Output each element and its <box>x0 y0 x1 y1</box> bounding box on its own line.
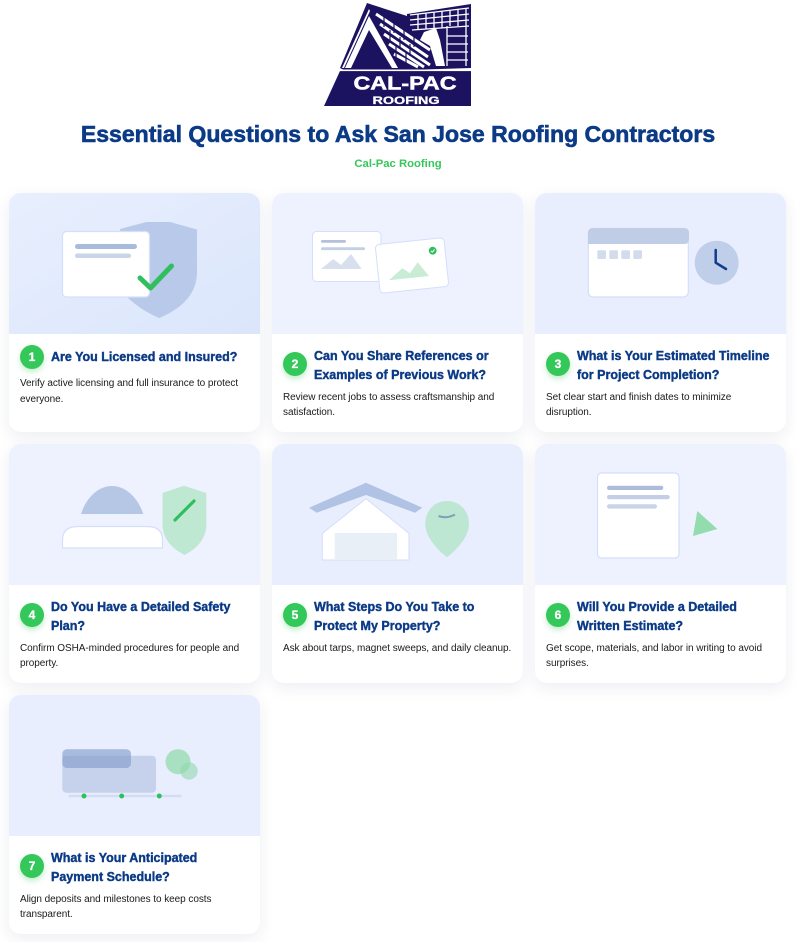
description 7: Align deposits and milestones to keep costs <box>20 894 211 904</box>
logo: Cal-Pac Roofing <box>324 3 471 107</box>
question heading 4: Plan? <box>51 618 85 632</box>
number badge 7: 7 <box>29 859 35 873</box>
panel: question 3 <box>535 193 786 432</box>
question heading 7: Payment Schedule? <box>51 870 170 884</box>
number badge 2 <box>283 352 307 376</box>
description 1: Verify active licensing and full insurance to protect <box>20 378 238 388</box>
number badge 5: 5 <box>292 608 298 622</box>
question heading 3: What is Your Estimated Timeline <box>577 348 769 362</box>
illustration: document and shield with check <box>9 193 260 334</box>
panel: question 6 <box>535 444 786 683</box>
illustration: hard hat and safety shield <box>9 444 260 585</box>
description 4 <box>20 642 239 668</box>
question heading 6 <box>576 600 737 632</box>
logo: Cal-Pac Roofing: CAL-PAC <box>354 74 456 94</box>
logo: Cal-Pac Roofing: ROOFING <box>372 95 440 107</box>
question heading 2: Can You Share References or <box>314 348 489 362</box>
number badge 5 <box>283 603 307 627</box>
question heading 5: Protect My Property? <box>314 618 440 632</box>
description 6 <box>546 642 762 668</box>
description 6: surprises. <box>546 658 589 668</box>
description 3: Set clear start and finish dates to minimize <box>546 392 731 402</box>
description 3: disruption. <box>546 406 591 418</box>
question heading 3: for Project Completion? <box>577 368 719 382</box>
description 6: Get scope, materials, and labor in writing to avoid <box>546 642 762 654</box>
illustration: calendar and clock <box>535 193 786 334</box>
description 7 <box>20 894 212 920</box>
panel: question 1 <box>9 193 260 432</box>
question heading 5: What Steps Do You Take to <box>314 600 474 614</box>
number badge 7 <box>20 854 44 878</box>
question heading 7: What is Your Anticipated <box>51 850 197 864</box>
number badge 1 <box>20 345 44 369</box>
description 1 <box>20 378 238 404</box>
description 1: everyone. <box>20 394 63 404</box>
description 2: Review recent jobs to assess craftsmanship and <box>283 392 494 402</box>
question heading 6: Written Estimate? <box>577 618 683 632</box>
question heading 3 <box>576 348 770 382</box>
number badge 2: 2 <box>292 357 298 371</box>
description 4: property. <box>20 658 58 668</box>
panel: question 7 <box>9 695 260 934</box>
description 7: transparent. <box>20 908 73 920</box>
panel: question 4 <box>9 444 260 683</box>
panel: question 5 <box>272 444 523 683</box>
question heading 7 <box>50 850 197 884</box>
title: Essential Questions to Ask San Jose Roofing Contractors <box>81 121 715 147</box>
question heading 2 <box>314 348 489 382</box>
question heading 4 <box>51 600 231 632</box>
number badge 6 <box>546 603 570 627</box>
illustration: written estimate <box>535 444 786 585</box>
description 4: Confirm OSHA-minded procedures for people and <box>20 642 239 654</box>
question heading 5 <box>314 600 474 633</box>
number badge 4: 4 <box>29 608 35 622</box>
question heading 6: Will You Provide a Detailed <box>577 600 737 614</box>
number badge 4 <box>20 603 44 627</box>
number badge 1: 1 <box>29 350 35 364</box>
question heading 1: Are You Licensed and Insured? <box>51 350 237 364</box>
number badge 6: 6 <box>555 608 561 622</box>
number badge 3: 3 <box>555 357 561 371</box>
illustration: payment schedule <box>9 695 260 836</box>
description 5: Ask about tarps, magnet sweeps, and daily cleanup. <box>283 642 511 654</box>
question heading 2: Examples of Previous Work? <box>314 368 486 382</box>
description 2 <box>283 392 494 418</box>
question heading 4: Do You Have a Detailed Safety <box>51 600 230 614</box>
subtitle: Cal-Pac Roofing <box>354 158 442 170</box>
illustration: project photos <box>272 193 523 334</box>
description 3 <box>546 392 731 418</box>
illustration: protected house <box>272 444 523 585</box>
number badge 3 <box>546 352 570 376</box>
panel: question 2 <box>272 193 523 432</box>
description 2: satisfaction. <box>283 406 335 418</box>
